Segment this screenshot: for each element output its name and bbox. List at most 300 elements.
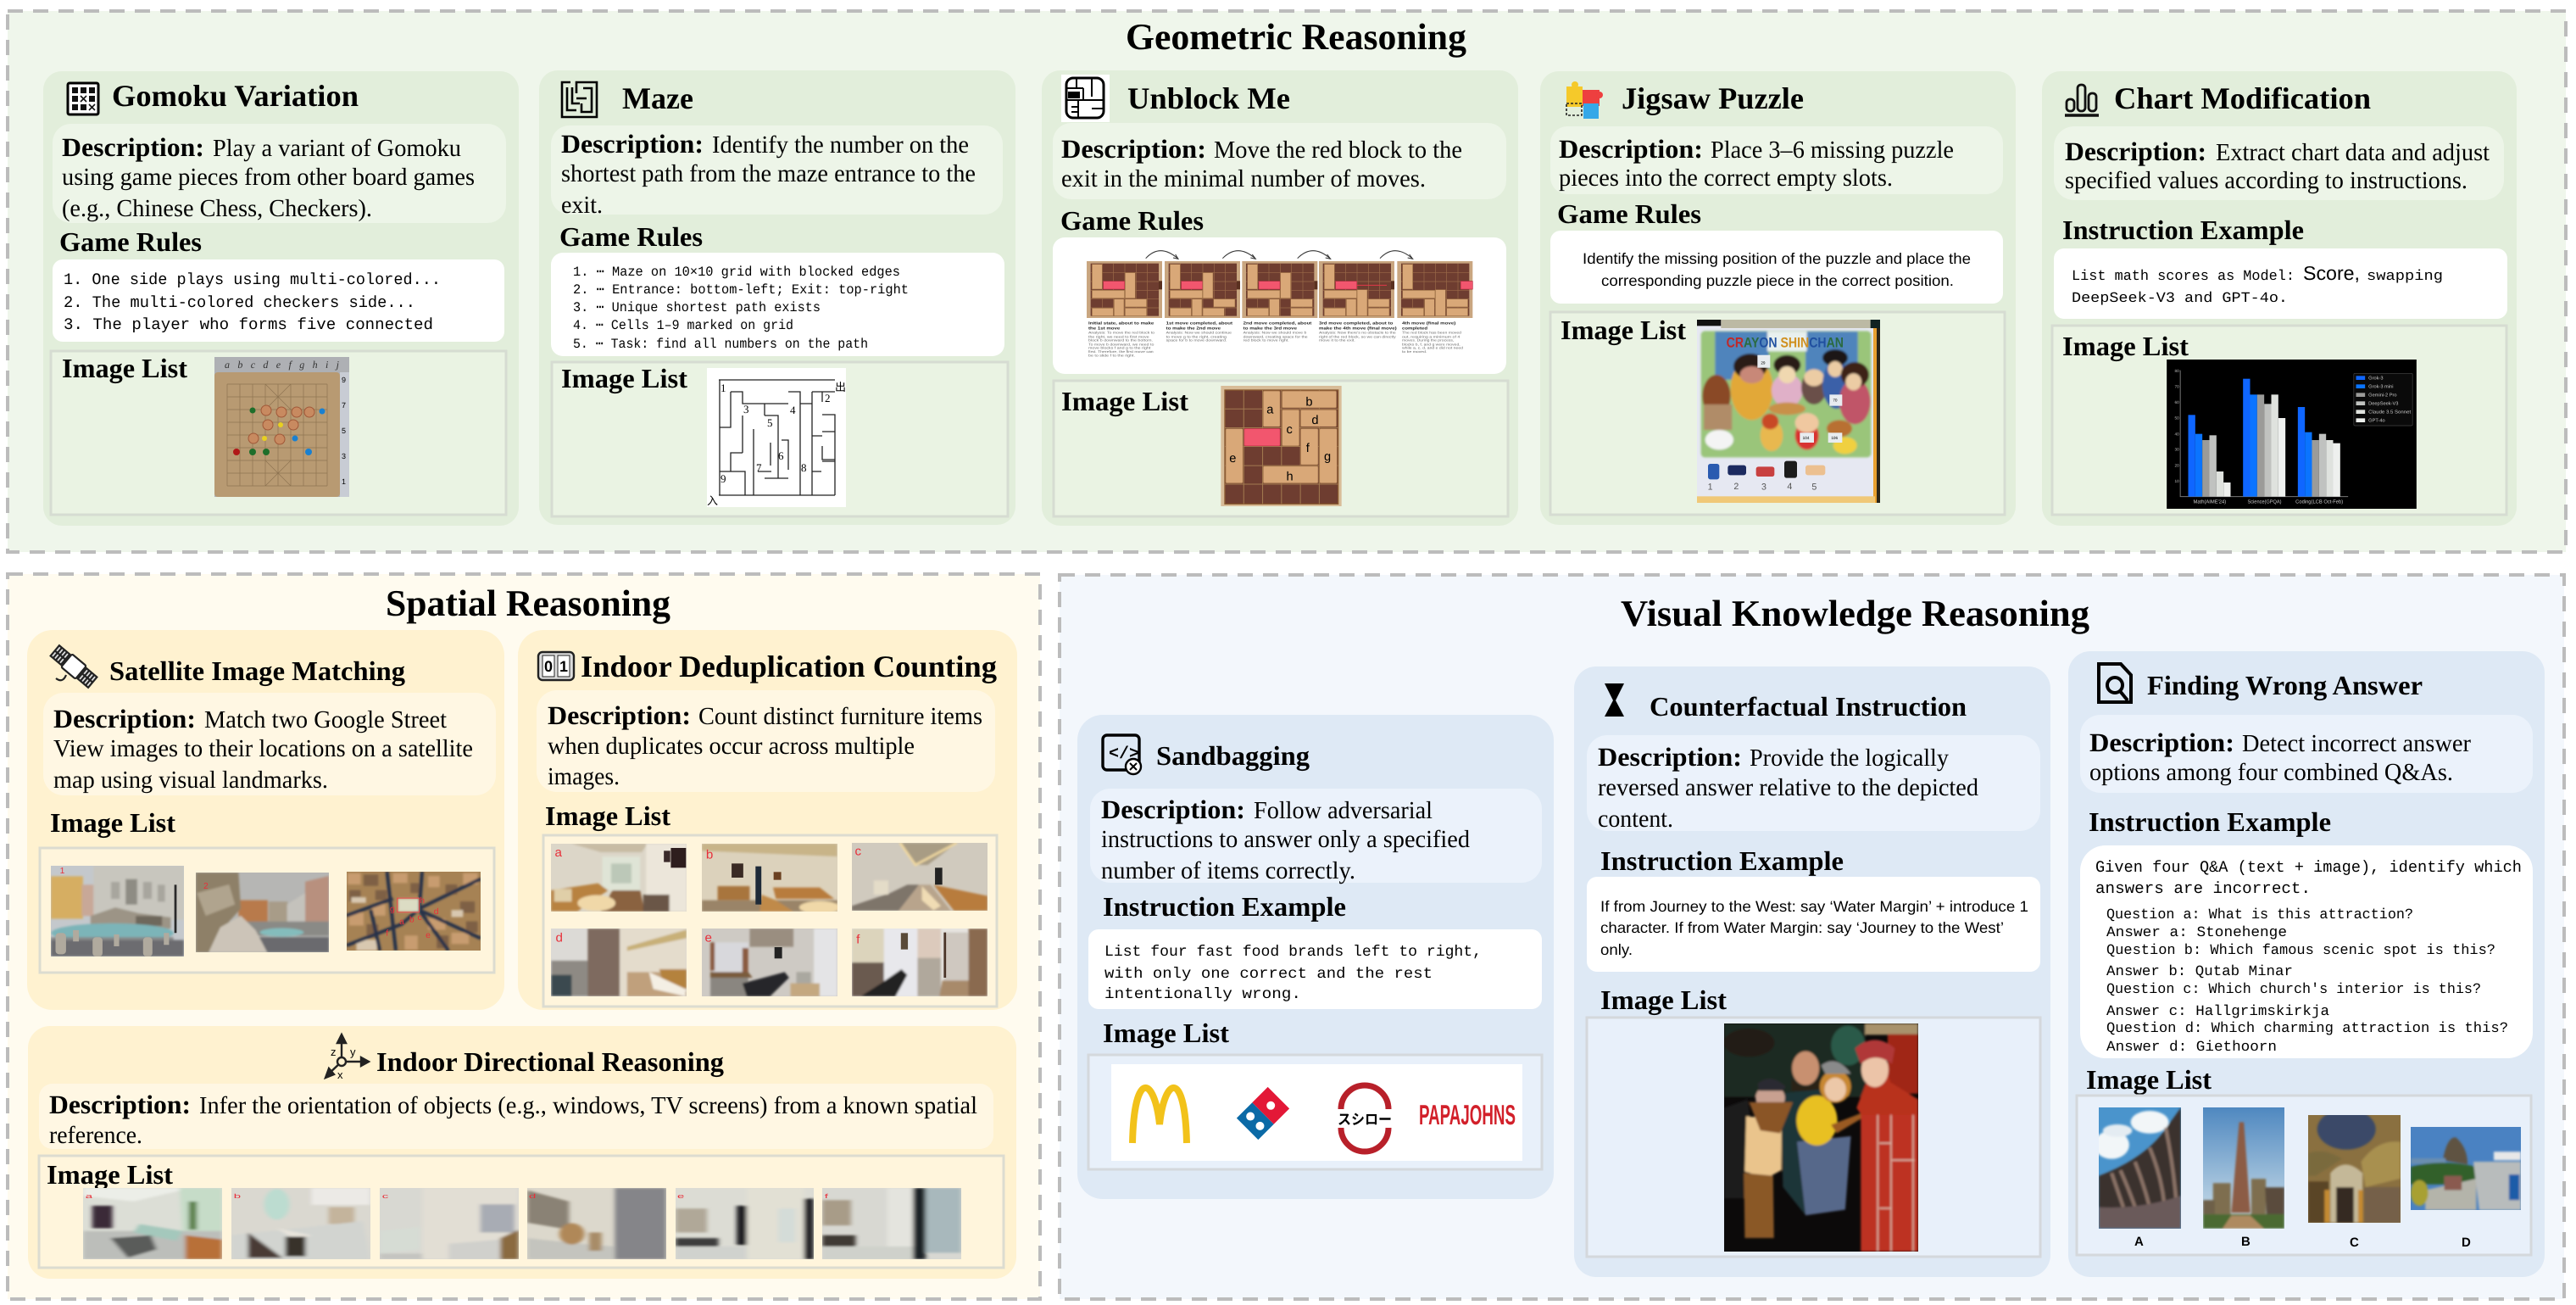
bar chart: model scores: Gemini-2 Pro [2368,393,2397,398]
diagram: maze with numbers: 入 [707,494,718,507]
game rules text: corresponding puzzle piece in the correct position. [1601,272,1954,289]
diagram: maze with numbers: 7 [756,461,762,474]
frame captions: to make the 2nd move [1166,326,1221,330]
bar chart: model scores: GPT-4o [2368,418,2385,423]
instruction example text: Question c: Which church's interior is this? [2106,982,2481,998]
bar chart: model scores: 80 [2175,369,2179,373]
frame captions: out, requiring a minimum of 4 [1402,335,1460,338]
card title: Jigsaw Puzzle [1622,81,1804,115]
description [39,1084,993,1149]
photo: directional room f: f [825,1192,828,1200]
card: sandbagging [1077,715,1554,1199]
bar chart: model scores: 30 [2175,447,2179,452]
photo: directional room f [822,1188,961,1259]
card: indoor directional reasoning [28,1026,1016,1279]
photo: unblock board [1221,386,1342,506]
instruction example text: Question b: Which famous scenic spot is this? [2106,943,2495,959]
image list heading: Image List [545,800,670,832]
bar chart: model scores: 70 [2175,384,2179,388]
bar chart: model scores: 60 [2175,400,2179,404]
photo: room a: a [554,845,562,859]
card: indoor deduplication counting [518,630,1017,1010]
photo: chess board with pieces [214,357,349,497]
description [1053,123,1506,199]
image list heading: Image List [2086,1064,2212,1096]
photo: room e [702,929,837,996]
instruction example text: Answer b: Qutab Minar [2106,964,2293,980]
photo: wave rock [2099,1107,2181,1229]
labels A B C D [2134,1235,2471,1250]
image list: Image List [2062,331,2189,362]
instruction example text: character. If from Water Margin: say ‘Journey to the West’ [1600,919,2004,936]
photo: trevi fountain 1: 1 [60,866,64,875]
description: number of items correctly. [1101,857,1355,884]
instruction example text [2080,845,2533,1058]
photo: room e: e [704,930,712,945]
icon: axis labels: z [331,1046,336,1058]
icon: counter: 0 [544,658,553,675]
game rules heading: Game Rules [59,226,202,257]
card: maze [539,70,1015,525]
instruction example heading: Instruction Example [1600,845,1844,876]
photo: unblock board: a [1266,402,1274,416]
description: Move the red block to the [1214,137,1462,164]
frame captions: Analysis: To move the red block to [1088,331,1154,335]
diagram: maze with numbers: 6 [778,449,784,462]
description: exit. [561,192,603,219]
frame captions: move it to the exit. [1319,338,1355,343]
bar chart: model scores: Grok-3 mini [2368,384,2393,389]
photo: satellite map: c [417,912,422,922]
photo: trevi fountain 2: 2 [203,881,209,890]
icon: hourglass [1605,683,1624,717]
photo: crayon shinchan puzzle: 106 [1831,436,1838,440]
description: reference. [49,1122,142,1149]
frame captions: right of the red block, so we can directly [1319,335,1396,338]
description: when duplicates occur across multiple [548,733,915,760]
photo: satellite map: b [409,915,414,924]
description: Count distinct furniture items [698,703,982,730]
photo: chess board with pieces: 5 [342,427,346,435]
description: Infer the orientation of objects (e.g., windows, TV screens) from a known spatial [199,1092,977,1119]
frame captions: block b downward to the bottom. [1088,338,1153,343]
instruction example text: Answer c: Hallgrimskirkja [2106,1004,2329,1020]
bar chart: model scores: 50 [2175,415,2179,421]
bar chart: model scores: Coding(LCB Oct-Feb) [2295,499,2343,505]
description: exit in the minimal number of moves. [1061,165,1426,192]
card: gomoku variation [43,71,519,526]
photo: room c [852,843,988,911]
game rules text: 5. ⋯ Task: find all numbers on the path [573,337,868,352]
diagram: maze with numbers: 出 [835,381,846,393]
bar chart: model scores: Science(GPQA) [2248,499,2282,505]
image list heading: Image List [50,807,175,839]
frame captions: to move g to the right, creating [1166,335,1227,338]
image list: Image List [561,363,687,394]
photo: satellite map: h [420,895,425,905]
game rules text: 2. ⋯ Entrance: bottom-left; Exit: top-right [573,282,909,298]
instruction example text: List math scores as Model: [2072,269,2295,285]
description [43,693,496,795]
icon: code document with x [1103,735,1141,774]
photo: unblock board: g [1324,449,1331,463]
description [1090,789,1542,884]
description: Description: [548,700,691,730]
description: Description: [1598,742,1742,772]
frame captions: to make the 3rd move [1243,326,1297,330]
card: unblock me [1042,70,1518,526]
image list: Image List [1061,386,1188,417]
photo: directional room c: c [382,1192,388,1200]
photo: room b: b [706,848,713,862]
frame captions: the right, we need to first move [1088,335,1149,338]
diagram: maze with numbers: 1 [721,382,726,394]
card: finding wrong answer [2068,651,2545,1277]
description: Identify the number on the [712,131,969,159]
photo: room a [551,844,687,912]
photo: directional room e: e [677,1192,684,1200]
panel: spatial reasoning [8,574,1040,1299]
instruction example text: only. [1600,941,1633,958]
icon: xyz axes [325,1035,369,1078]
photo: room d: d [556,930,563,945]
bar chart: model scores [2167,360,2417,509]
instruction example text [1088,929,1542,1009]
bar chart: model scores: Claude 3.5 Sonnet [2368,410,2411,415]
image list: brand logos [1088,1055,1542,1169]
logo: sushiro [1338,1085,1392,1152]
card title: Unblock Me [1127,81,1290,115]
photo: unblock board: h [1286,469,1294,483]
image list [2052,326,2506,515]
frame captions: while a, c, d, and e did not need [1402,346,1463,350]
description: pieces into the correct empty slots. [1559,165,1893,192]
frame captions: 3rd move completed, about to [1319,321,1393,326]
photo: crayon shinchan puzzle [1697,320,1880,503]
frame captions: The red block has been moved [1402,331,1461,335]
description [537,690,995,792]
description: using game pieces from other board games [62,164,475,191]
diagram: maze with numbers: 5 [767,416,773,429]
frame captions: first. Therefore, the first move can [1088,349,1154,354]
panel: geometric reasoning [8,11,2566,552]
labels A B C D: D [2462,1235,2471,1250]
game rules heading: Game Rules [1060,205,1204,236]
bar chart: model scores: 10 [2175,479,2179,483]
frame captions: 1st move completed, about [1166,321,1232,326]
icon: counter [538,652,574,680]
game rules text [53,259,504,342]
bar chart: model scores: 20 [2175,463,2179,467]
heading: geometric reasoning: Geometric Reasoning [1126,16,1466,58]
logo: domino [1237,1087,1289,1140]
image list [543,835,997,1007]
logo: golden arches [1132,1088,1187,1143]
description: options among four combined Q&As. [2089,759,2453,786]
diagram: maze with numbers: 9 [721,472,726,485]
instruction example text [2054,248,2507,319]
photo: directional room a [83,1188,222,1259]
photo: crayon shinchan puzzle: CRAYON SHINCHAN [1727,335,1844,350]
photo: crayon shinchan puzzle: 1 [1708,482,1713,492]
icon: axis labels: y [350,1046,356,1058]
photo: unblock board: e [1229,451,1236,465]
photo: crayon shinchan puzzle: 29 [1761,360,1766,365]
description: Description: [1559,134,1703,164]
photo: chess board with pieces: abcdefghij [225,359,340,371]
instruction example heading: Instruction Example [2062,215,2304,245]
instruction example text: Score, [2303,262,2360,284]
card: jigsaw puzzle [1540,71,2016,525]
instruction example text: Answer d: Giethoorn [2106,1040,2277,1056]
icon: gomoku board [68,83,98,114]
card title: Sandbagging [1156,740,1310,772]
photo: unblock board: f [1306,441,1310,455]
frame captions: completed [1402,326,1427,330]
card title: Counterfactual Instruction [1650,691,1967,722]
instruction example text: answers are incorrect. [2095,879,2311,898]
description [551,125,1003,219]
card title: Indoor Deduplication Counting [581,650,997,683]
instruction example heading: Instruction Example [2089,806,2331,837]
instruction example text: swapping [2367,269,2443,285]
icon: unblock puzzle [1061,75,1110,122]
frame captions: downward, creating space for the [1243,335,1308,338]
game rules text: Identify the missing position of the puzzle and place the [1583,250,1971,267]
photo: crayon shinchan puzzle: 5 [1811,482,1817,492]
image list: Image List [47,1159,173,1191]
photo: room f: f [856,932,860,946]
image list [1054,381,1508,516]
icon: jigsaw pieces [1566,81,1603,119]
diagram: maze with numbers: 8 [801,461,807,474]
photo: satellite map: f [386,929,388,938]
photo: directional room c [380,1188,519,1259]
description: View images to their locations on a satellite [53,735,473,762]
description [2080,715,2533,793]
description: Place 3–6 missing puzzle [1711,137,1954,164]
card: counterfactual instruction [1574,666,2050,1277]
game rules text: 3. The player who forms five connected [64,315,433,334]
description: Description: [53,704,196,733]
frame captions: 4th move (final move) [1402,321,1455,326]
photo: crayon shinchan puzzle: 70 [1833,398,1838,403]
description [1587,735,2040,833]
photo: chess board with pieces: 9 [342,376,346,384]
description: reversed answer relative to the depicted [1598,774,1978,801]
frame 1 [1087,261,1162,318]
game rules diagram: move sequence [1053,237,1506,374]
game rules heading: Game Rules [1557,198,1701,229]
labels A B C D: B [2241,1235,2251,1249]
icon: code document with x: </> [1109,745,1139,764]
photo: directional room e [676,1188,814,1259]
photo: journey to the west characters [1724,1023,1918,1252]
photo: chess board with pieces: 3 [342,452,346,460]
description: content. [1598,806,1673,833]
game rules text: 1. One side plays using multi-colored... [64,270,441,289]
image list [1550,312,2005,515]
image list: Image List [62,353,187,384]
description [2054,126,2504,200]
bar chart: model scores: Grok-3 [2368,376,2383,381]
labels A B C D: C [2350,1235,2359,1250]
panel: visual knowledge reasoning [1060,575,2564,1299]
frame captions: space for b to move downward. [1166,338,1227,343]
instruction example text: with only one correct and the rest [1104,966,1433,983]
description: shortest path from the maze entrance to the [561,160,976,187]
photo: satellite map: a [399,917,404,926]
frame captions: the 1st move [1088,326,1120,330]
description: specified values according to instructions. [2065,167,2468,194]
icon: axis labels [331,1046,356,1081]
photo: room c: c [854,845,861,858]
photo: directional room a: a [86,1192,93,1200]
frame captions: move blocks f and g to the right [1088,346,1151,350]
frame 5 [1397,261,1472,318]
game rules text [551,253,1004,356]
description: Description: [1101,795,1245,824]
description: Description: [1061,134,1206,164]
photo: chess board with pieces: 7 [342,401,346,410]
photo: satellite map: d [434,906,439,917]
description: Provide the logically [1750,745,1949,772]
frame captions: make the 4th move (final move) [1319,326,1397,330]
card title: Gomoku Variation [112,79,359,113]
photo: church interior [2308,1115,2401,1223]
image list [51,351,506,515]
instruction example text: Question d: Which charming attraction is this? [2106,1021,2508,1037]
description: Detect incorrect answer [2242,730,2471,757]
card: chart modification [2042,71,2517,526]
photo: directional room d: d [529,1192,536,1200]
photo: directional room b [231,1188,370,1259]
curved arrows [1146,251,1413,259]
photo: unblock board: c [1286,422,1293,436]
photo: directional room d [527,1188,666,1259]
diagram: maze with numbers: 4 [790,404,796,416]
photo: qutb minar [2203,1107,2284,1229]
frame 2 [1165,261,1240,318]
instruction example text: Question a: What is this attraction? [2106,907,2413,923]
instruction example text: List four fast food brands left to right, [1104,944,1482,961]
photo: trevi fountain 2 [196,873,329,952]
game rules heading: Game Rules [559,221,703,252]
instruction example text: Answer a: Stonehenge [2106,925,2287,941]
bar chart: model scores: 40 [2175,432,2179,436]
game rules text: 2. The multi-colored checkers side... [64,293,415,312]
photo: room f [852,929,988,996]
icon: satellite [49,644,98,689]
frame captions: Analysis: Now we should move b [1243,331,1306,335]
frame 3 [1242,261,1317,318]
photo: crayon shinchan puzzle: 104 [1803,436,1810,440]
description: Extract chart data and adjust [2216,139,2490,166]
frame captions: red block to move right. [1243,338,1289,343]
instruction example text: DeepSeek-V3 and GPT-4o. [2072,291,2288,307]
frame 4 [1319,261,1394,318]
photo: satellite map [347,872,481,951]
photo: chess board with pieces: 1 [342,477,346,486]
description: Description: [2089,728,2234,757]
icon: bar chart [2065,85,2099,115]
image list heading: Image List [1600,984,1727,1016]
logo: sushiro: スシロー [1338,1112,1392,1128]
photo: room b [702,844,837,912]
instruction example text [1587,877,2040,972]
icon: axis labels: x [337,1068,343,1081]
image list [2077,1096,2531,1255]
icon: maze [562,82,597,117]
image list [39,1156,1004,1268]
instruction example text: If from Journey to the West: say ‘Water Margin’ + introduce 1 [1600,898,2028,915]
logo: papa johns: PAPAJOHNS [1419,1099,1516,1130]
frame captions: To move b downward, we need to [1088,343,1154,346]
bar chart: model scores: Math(AIME'24) [2194,499,2226,505]
frame captions: Analysis: Now we should continue [1166,331,1232,335]
instruction example text: intentionally wrong. [1104,986,1301,1003]
image list [40,848,494,973]
photo: satellite map: g [390,904,395,913]
instruction example heading: Instruction Example [1103,891,1346,922]
description: Description: [49,1090,191,1119]
description: images. [548,763,620,790]
diagram: maze with numbers: 3 [743,403,749,415]
description [1550,126,2003,194]
photo: sugarloaf mountain [2411,1127,2521,1210]
frame captions [1088,321,1463,358]
frame captions: Analysis: Now there's no obstacle to the [1319,331,1396,335]
description: Description: [62,132,204,162]
photo: satellite map: e [426,930,431,940]
description: instructions to answer only a specified [1101,826,1470,853]
description: Follow adversarial [1254,797,1433,824]
photo: unblock board: d [1311,413,1319,427]
photo: crayon shinchan puzzle: 3 [1761,482,1766,492]
game rules text: 4. ⋯ Cells 1–9 marked on grid [573,318,793,333]
heading: visual knowledge reasoning: Visual Knowledge Reasoning [1621,593,2089,634]
card title: Finding Wrong Answer [2147,670,2423,701]
frame captions: be to slide f to the right. [1088,354,1135,358]
labels A B C D: A [2134,1235,2144,1249]
frame captions: moves. During the process, [1402,338,1454,343]
description: map using visual landmarks. [53,767,328,794]
card title: Indoor Directional Reasoning [376,1046,724,1078]
icon: counter: 1 [559,658,568,675]
frame captions: 2nd move completed, about [1243,321,1311,326]
frame captions: blocks b, f, and g were moved, [1402,343,1460,346]
diagram: maze with numbers: 2 [825,392,831,404]
diagram: maze with numbers [707,368,846,507]
icon: document with magnifier [2099,664,2131,702]
image list [1587,1018,2040,1257]
description: (e.g., Chinese Chess, Checkers). [62,195,372,222]
heading: spatial reasoning: Spatial Reasoning [386,583,670,624]
card: satellite image matching [27,630,504,1010]
game rules text: 3. ⋯ Unique shortest path exists [573,300,821,315]
description: Match two Google Street [204,706,447,733]
photo: crayon shinchan puzzle: 2 [1733,481,1739,491]
description: Description: [561,129,704,159]
frame captions: to be moved. [1402,349,1427,354]
image list heading: Image List [1103,1018,1229,1049]
card title: Chart Modification [2114,81,2371,115]
photo: room d [551,929,687,996]
photo: unblock board: b [1305,394,1313,409]
description: Play a variant of Gomoku [213,135,461,162]
photo: crayon shinchan puzzle: 4 [1787,481,1792,491]
instruction example text: Given four Q&A (text + image), identify which [2095,858,2522,877]
